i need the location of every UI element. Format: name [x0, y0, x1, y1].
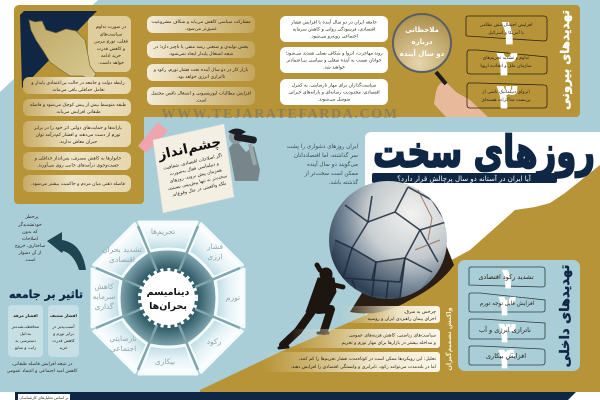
- text: outlook body: اگر اصلاحات اقتصادی، شفافیت: [163, 152, 223, 172]
- heading: external threats: تهدیدهای بیرونی: [558, 10, 573, 110]
- item 1: تشدید رکود اقتصادی: [478, 273, 534, 281]
- card: instability: است.: [195, 98, 207, 104]
- card: vulnerable groups: خرید: [59, 345, 68, 350]
- card: affluent groups: [8, 305, 43, 357]
- item 4: ۴: [498, 342, 516, 375]
- panel: title area: [0, 127, 600, 392]
- card: brain drain: خواهند شد.: [323, 66, 345, 70]
- card: affluent groups: اقشار مرفه: [13, 313, 38, 318]
- band: east: [340, 306, 440, 323]
- card: households: [23, 152, 131, 170]
- panel: political and economic column: [147, 16, 255, 105]
- text: left note: خودتشدیدگر: [17, 221, 42, 228]
- item 2: [469, 289, 545, 322]
- text: intro card: خرید ادامه: [101, 54, 121, 59]
- item 1: افزایش احتمال تنش نظامی: [480, 23, 532, 28]
- item 2: افزایش قابل توجه تورم: [480, 301, 535, 307]
- text: intro paragraph: سر گذاشته، اما اقتصاددانان: [294, 151, 358, 159]
- card: subsidies: یارانه‌ها و حمایت‌های دولتی اثر خود را در برابر: [33, 126, 123, 131]
- panel: internal threats: [458, 260, 580, 375]
- card: vulnerable groups: کاهش قدرت: [52, 338, 75, 343]
- wheel labels: تورم: [226, 293, 240, 302]
- card: subsidies: تورم از دست می‌دهند و اقشار کم‌درآمد توان: [36, 132, 121, 138]
- item 1: [469, 262, 545, 295]
- icon: man pushing boulder: [279, 265, 343, 348]
- card: instability: افزایش مطالبات اپوزیسیونی و اشتغال ناقص محتمل: [151, 92, 251, 96]
- card: vulnerable groups: اقشار ضعیف: [50, 313, 78, 318]
- icon: note paper with tape: [138, 122, 234, 213]
- card: vulnerable groups: آسیب‌پذیر در: [51, 324, 75, 329]
- wheel labels: کاهش: [94, 282, 114, 291]
- item 3: انزوای دیپلماتیک ناشی از: [481, 89, 530, 95]
- card: instability: [147, 87, 255, 105]
- footer bar: [15, 392, 600, 400]
- item 1: ۱: [498, 13, 518, 53]
- card: affluent groups: محافظت‌شده‌تر: [11, 324, 39, 329]
- panel: white analysis cards: [280, 16, 388, 105]
- item 3: بن‌بست مذاکرات هسته‌ای: [481, 97, 531, 103]
- icon: magnifier with hand: [393, 14, 488, 117]
- card: policy makers: سیاست‌گذاران برای مهار نارضایتی، به کنترل: [292, 82, 376, 88]
- icon: boulder: [329, 181, 454, 314]
- card: participation: عمیق‌تر می‌شود.: [185, 27, 217, 32]
- wheel labels: سرمایه: [93, 292, 115, 301]
- item 3: ناترازی انرژی و آب: [479, 325, 531, 334]
- text: impact summary: [7, 362, 78, 374]
- card: production: بخش تولیدی و صنعتی رشد منفی یا ناچیز دارد؛ در: [153, 45, 248, 50]
- card: participation: [147, 16, 255, 33]
- text: intro card: [94, 25, 128, 66]
- text: intro paragraph: [287, 144, 358, 186]
- heading: internal threats: تهدیدهای داخلی: [558, 265, 573, 367]
- text: impact summary: در نتیجه افزایش فاصله طبقاتی،: [12, 362, 72, 367]
- wheel labels: دینامیسم: [147, 287, 190, 298]
- wheel labels: رکود: [207, 337, 222, 346]
- heading: outlook: چشم‌انداز: [156, 134, 223, 163]
- text: outlook body: و دیپلماسی فعال به‌صورت: [169, 162, 219, 177]
- wheel labels: [93, 227, 240, 366]
- arrow: [47, 232, 86, 270]
- text: magnifier caption: دو سال آینده: [400, 49, 445, 58]
- item 1: با آمریکا و اسرائیل: [488, 30, 524, 36]
- text: intro card: خواهد داشت.: [98, 61, 124, 66]
- panel: decision makers reaction: [262, 306, 453, 372]
- text: left note: اصلاحات: [22, 237, 38, 242]
- text: outlook body: همزمان پیش نروند، روزهای: [169, 168, 223, 184]
- card: society: اجتماعی روبه‌رو می‌شود.: [310, 34, 358, 40]
- card: society: جامعه ایران در دو سال آینده با افزایش فشار: [290, 20, 377, 26]
- wheel labels: بیکاری: [155, 357, 175, 366]
- band: analysis: اما در بلندمدت می‌توانند رکود، نابرابری و وابستگی اقتصادی را افزایش دهند.: [291, 363, 436, 370]
- item 3: ۳: [497, 77, 518, 117]
- text: impact summary: کاهش امید اجتماعی و اعتماد عمومی: [7, 368, 78, 374]
- card: subsidies: جبران معاش ندارند.: [59, 140, 97, 145]
- text: outlook body: سخت‌تر نه تنها پیش‌بینی نیستند،: [167, 174, 228, 192]
- wheel labels: تشدید بحران: [102, 245, 142, 254]
- card: middle class: [23, 99, 131, 116]
- text: intro paragraph: ممکن است سخت‌تر از: [304, 170, 358, 177]
- band: austerity: [290, 329, 440, 348]
- text: intro card: سیاست‌های: [100, 32, 122, 38]
- card: labour market: نااترازی انرژی خواهد بود.: [177, 75, 225, 80]
- text: left note: است.: [24, 258, 36, 263]
- wheel labels: اجتماعی: [110, 344, 136, 353]
- subtitle band: آیا ایران در آستانه دو سال پرچالش قرار دارد؟: [397, 174, 532, 183]
- card: policy makers: متوسل می‌شوند.: [318, 98, 351, 102]
- card: production: نتیجه اشتغال پایدار ایجاد نمی‌شود.: [168, 52, 234, 57]
- text: outlook body: [162, 152, 229, 199]
- text: intro paragraph: ایران روزهای دشواری را پشت: [287, 144, 358, 150]
- card: affluent groups: به‌دلیل: [20, 331, 31, 336]
- icon: crisis dynamics wheel: [92, 222, 244, 374]
- item 1: [466, 13, 547, 53]
- icon: Iran map: [29, 20, 96, 80]
- card: policy makers: اقتصادی، محدودیت رسانه‌ای و یارانه‌های جبرانی: [288, 90, 380, 96]
- band: analysis: [262, 352, 440, 372]
- text: intro card: فعلی، تورم مزمن: [94, 40, 128, 44]
- wheel labels: فشار: [206, 242, 224, 251]
- card: affluent groups: دسترسی به: [15, 338, 36, 343]
- text: intro card: در صورت تداوم: [96, 25, 126, 30]
- card: households: خانوارها به کاهش مصرف، پس‌انداز حداقلی و: [34, 156, 122, 162]
- item 4: [469, 342, 545, 375]
- text: intro card: و کاهش قدرت: [97, 46, 125, 52]
- card: labour market: بازار کار در دو سال آینده تحت فشار تورم، رکود و: [153, 67, 248, 73]
- item 2: سازمان ملل و اتحادیه اروپا: [480, 64, 532, 69]
- item 1: ۱: [498, 262, 516, 295]
- text: magnifier caption: ملاحظاتی: [405, 26, 439, 34]
- subtitle band: [372, 173, 557, 183]
- heading: outlook: [156, 134, 231, 200]
- card: labour market: [147, 64, 255, 81]
- text: magnifier caption: [400, 26, 445, 58]
- card: mental gap: [23, 175, 131, 192]
- footer tag: بر اساس تحلیل‌های کارشناسان: [19, 395, 69, 400]
- wheel labels: ارزی: [207, 252, 223, 261]
- wheel labels: تحریم‌ها: [151, 227, 175, 236]
- item 3: ۳: [498, 316, 516, 349]
- card: state and society: رابطه دولت و جامعه در حالت بی‌اعتمادی پایدار و: [30, 81, 125, 86]
- band: austerity: و مداخله بیشتر در بازارها برای مهار تورم و تحریم: [342, 341, 436, 346]
- wheel labels: نارضایتی: [109, 334, 137, 343]
- card: households: جست‌وجوی درآمدهای جانبی روی می‌آورند.: [37, 162, 119, 168]
- band: austerity: سیاست‌های ریاضتی، کاهش هزینه‌های عمومی: [349, 332, 436, 338]
- panel: social consequences column: [20, 11, 131, 192]
- item 3: [467, 77, 547, 117]
- icon: man with binoculars: [228, 128, 260, 181]
- item 2: ۲: [498, 289, 516, 322]
- card: brain drain: جوانان نسبت به آینده شغلی و سیاسی بی‌اعتمادتر: [286, 58, 382, 64]
- heading: reaction: واکنش تصمیم‌گیران: [445, 307, 453, 371]
- card: mental gap: فاصله ذهنی میان مردم و حاکمیت بیشتر می‌شود.: [31, 181, 125, 187]
- card: vulnerable groups: برابر تورم و: [52, 331, 74, 336]
- item 2: [467, 44, 547, 84]
- card: participation: مشارکت سیاسی کاهش می‌یابد و شکاف مشروعیت: [151, 19, 251, 25]
- card: state and society: [23, 77, 131, 94]
- band: analysis: تحلیل: این رویکردها ممکن است در کوتاه‌مدت فشار تحریم‌ها را کم کنند،: [299, 356, 437, 362]
- card: policy makers: [280, 79, 388, 105]
- panel: external threats: [466, 10, 573, 117]
- card: middle class: طبقاتی افزایش می‌یابد.: [55, 110, 101, 115]
- text: left note: از آن دشوار: [18, 250, 41, 256]
- text: magnifier caption: درباره: [411, 38, 433, 46]
- card: production: [147, 41, 255, 58]
- wheel labels: گذاری: [94, 302, 114, 311]
- text: intro paragraph: گذشته باشد.: [329, 178, 358, 186]
- card: vulnerable groups: [48, 305, 79, 357]
- heading: impact on society: تاثیر بر جامعه: [9, 288, 83, 301]
- band: east: اجرای پیمان راهبردی ایران و روسیه: [368, 317, 436, 322]
- card: brain drain: [280, 47, 388, 73]
- item 3: [469, 316, 545, 349]
- item 2: تداوم و تشدید تحریم‌های: [483, 56, 530, 61]
- text: outlook body: بلکه واقعیتی در حال وقوع‌اند.: [171, 180, 227, 198]
- item 2: ۲: [497, 44, 518, 84]
- text: left note: ساختاری، خروج: [15, 244, 45, 249]
- wheel labels: اقتصادی: [109, 255, 135, 264]
- wheel labels: بحران‌ها: [149, 301, 187, 312]
- text: left note: پرخطر: [25, 215, 39, 220]
- text: left note: که بدون: [22, 229, 39, 235]
- text: left note: [15, 215, 45, 263]
- band: east: چرخش به شرق،: [404, 309, 436, 315]
- card: subsidies: [23, 121, 131, 147]
- card: state and society: تعامل حداقلی باقی می‌ماند.: [51, 88, 105, 93]
- panel: top gold panel: [14, 5, 580, 204]
- card: brain drain: روند مهاجرت، انزوا و شکاف نسلی تشدید می‌شود؛: [285, 50, 383, 56]
- card: affluent groups: رانت و منابع: [15, 345, 36, 350]
- card: society: اقتصادی، فرسودگی روانی و کاهش سرمایه: [293, 26, 375, 32]
- card: middle class: طبقه متوسط بیش از پیش کوچک می‌شود و فاصله: [30, 102, 126, 108]
- text: intro paragraph: می‌گویند دو سال آینده: [307, 160, 358, 168]
- watermark: WWW.TEJARATEFARDA.COM: [161, 107, 399, 122]
- card: society: [280, 16, 388, 42]
- item 4: افزایش بیکاری: [486, 352, 526, 360]
